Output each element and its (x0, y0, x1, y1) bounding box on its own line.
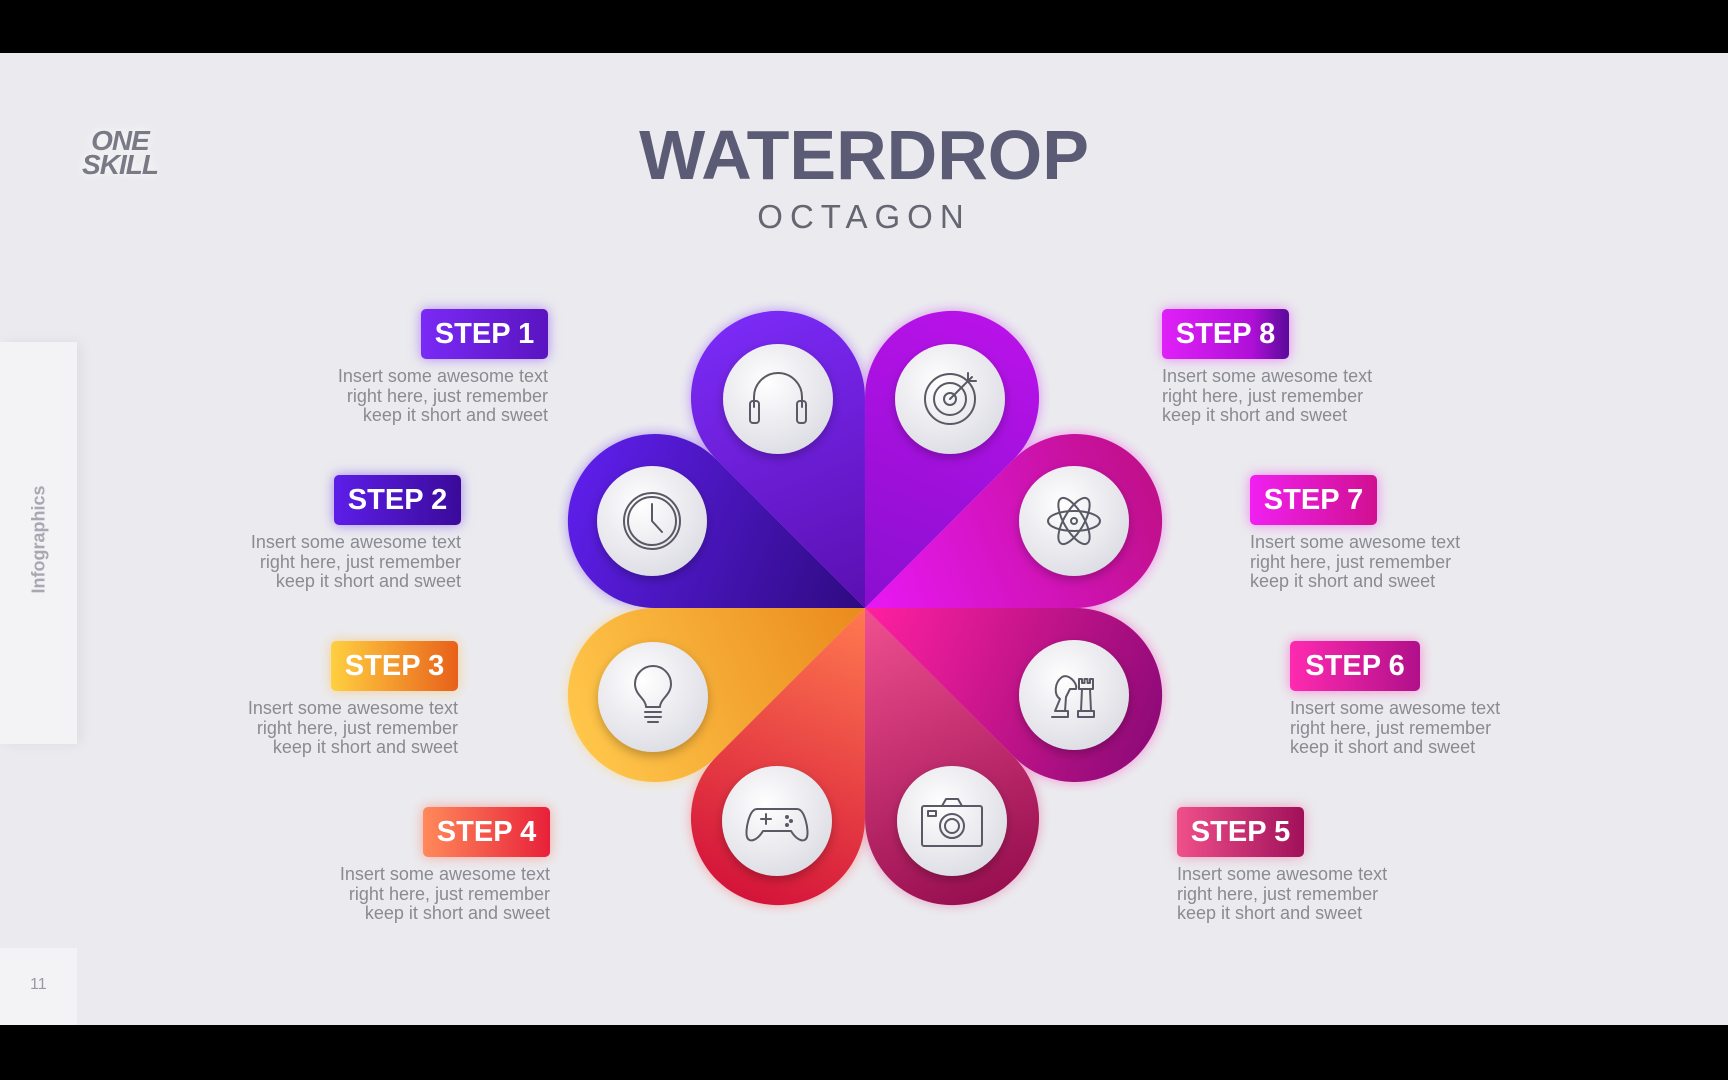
STEP 3: STEP 3 (345, 650, 444, 682)
STEP 3 (248, 633, 466, 757)
STEP 8 (1154, 300, 1372, 425)
icon: camera (897, 766, 1007, 876)
STEP 2: STEP 2 (348, 484, 447, 516)
STEP 8: STEP 8 (1176, 318, 1275, 350)
STEP 4: keep it short and sweet (365, 903, 550, 923)
STEP 8: right here, just remember (1162, 386, 1363, 406)
STEP 1: Insert some awesome text (338, 366, 548, 386)
petal 2 (541, 407, 898, 688)
STEP 7 (1242, 466, 1460, 591)
STEP 3: right here, just remember (257, 718, 458, 738)
petal 3 (541, 528, 898, 809)
petal 5 (785, 575, 1066, 932)
icon: clock (597, 466, 707, 576)
STEP 2 (251, 466, 470, 591)
STEP 6: STEP 6 (1305, 650, 1405, 682)
icon: headphones (723, 344, 833, 454)
STEP 2: keep it short and sweet (276, 571, 461, 591)
icon: bulb (598, 642, 708, 752)
STEP 5: right here, just remember (1177, 884, 1378, 904)
STEP 1 (338, 300, 556, 425)
side panel (0, 342, 77, 744)
petal 1 (664, 284, 945, 641)
STEP 7: keep it short and sweet (1250, 571, 1435, 591)
side label: Infographics (28, 486, 48, 594)
STEP 5: Insert some awesome text (1177, 864, 1387, 884)
STEP 3: keep it short and sweet (273, 737, 458, 757)
STEP 4: Insert some awesome text (340, 864, 550, 884)
STEP 4: STEP 4 (437, 816, 536, 848)
STEP 7: right here, just remember (1250, 552, 1451, 572)
STEP 5 (1169, 799, 1387, 923)
STEP 1: right here, just remember (347, 386, 548, 406)
logo (82, 125, 158, 180)
STEP 8: keep it short and sweet (1162, 405, 1347, 425)
page number panel (0, 948, 77, 1025)
logo: SKILL (82, 149, 158, 180)
STEP 1: STEP 1 (435, 318, 534, 350)
icon: target (895, 344, 1005, 454)
STEP 4 (340, 799, 558, 923)
page number: 11 (30, 976, 47, 993)
petal 6 (832, 528, 1189, 809)
STEP 7: STEP 7 (1264, 484, 1363, 516)
STEP 6: keep it short and sweet (1290, 737, 1475, 757)
STEP 6: Insert some awesome text (1290, 698, 1500, 718)
icon: gamepad (722, 766, 832, 876)
STEP 3: Insert some awesome text (248, 698, 458, 718)
STEP 2: Insert some awesome text (251, 532, 461, 552)
STEP 8: Insert some awesome text (1162, 366, 1372, 386)
STEP 2: right here, just remember (260, 552, 461, 572)
STEP 1: keep it short and sweet (363, 405, 548, 425)
STEP 6 (1282, 632, 1500, 757)
STEP 7: Insert some awesome text (1250, 532, 1460, 552)
STEP 6: right here, just remember (1290, 718, 1491, 738)
petal 8 (785, 284, 1066, 641)
STEP 5: STEP 5 (1191, 816, 1290, 848)
subtitle: OCTAGON (757, 198, 971, 235)
STEP 5: keep it short and sweet (1177, 903, 1362, 923)
STEP 4: right here, just remember (349, 884, 550, 904)
petal glows (541, 284, 1189, 932)
logo: ONE (91, 125, 149, 156)
petal 7 (832, 407, 1189, 688)
petal 4 (664, 575, 945, 932)
icon: atom (1019, 466, 1129, 576)
title: WATERDROP (639, 116, 1089, 194)
icon: chess (1019, 640, 1129, 750)
